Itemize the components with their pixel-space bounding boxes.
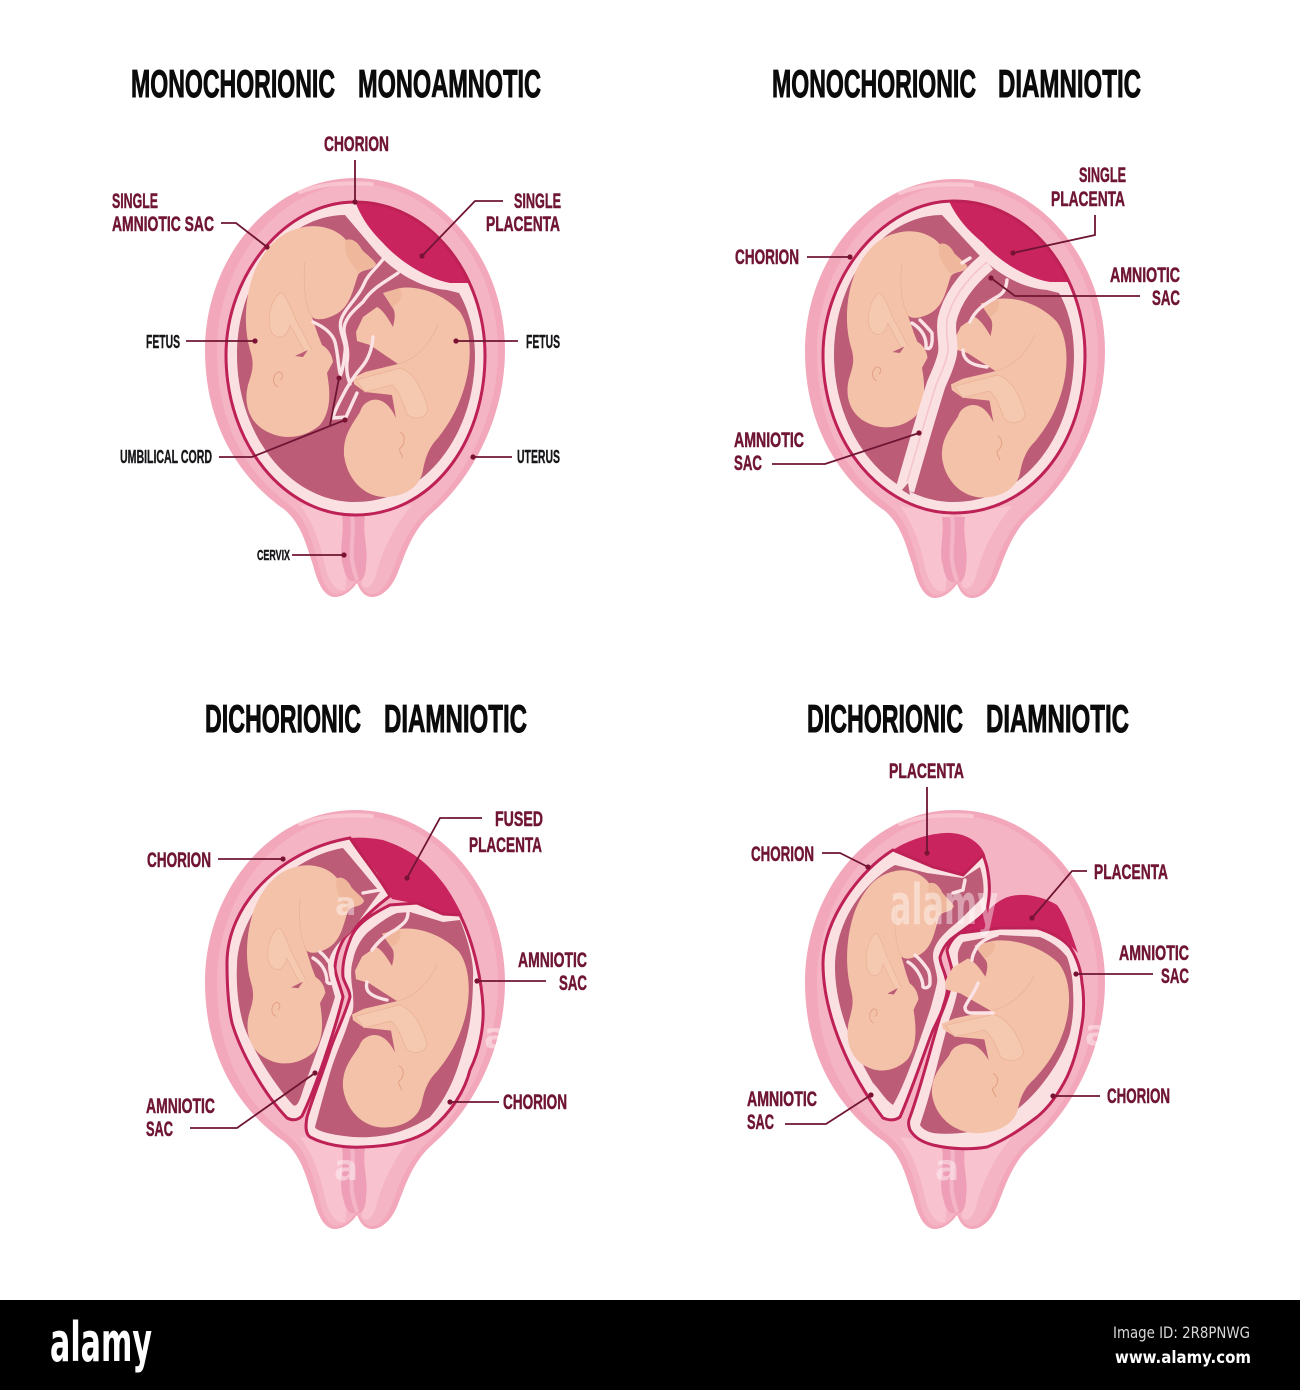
- chorion: [226, 202, 485, 515]
- callouts: PLACENTA: [1051, 188, 1125, 211]
- umbilical cords: [912, 258, 1007, 367]
- callouts: UTERUS: [517, 447, 560, 467]
- panel: dichorionic diamniotic fused: [146, 698, 587, 1229]
- callouts: [112, 133, 561, 564]
- callouts: AMNIOTIC: [734, 429, 804, 452]
- callouts: PLACENTA: [486, 213, 560, 236]
- callouts: [734, 164, 1180, 475]
- callouts: CHORION: [735, 246, 799, 269]
- amniotic band: [226, 202, 485, 515]
- callouts: SINGLE: [514, 190, 561, 213]
- right cavity: [315, 912, 473, 1137]
- callouts: SAC: [146, 1118, 173, 1141]
- umbilical cords: [908, 880, 997, 1013]
- callouts: CHORION: [324, 133, 389, 156]
- callouts: PLACENTA: [1094, 861, 1168, 884]
- uterus: [205, 810, 505, 1229]
- fetus right: [344, 287, 470, 497]
- callouts: CHORION: [751, 843, 814, 866]
- title: MONOCHORIONIC: [772, 63, 976, 106]
- placenta: [350, 838, 462, 916]
- left sac: [823, 850, 989, 1120]
- watermark marks: a: [335, 885, 357, 923]
- callouts: AMNIOTIC: [146, 1095, 215, 1118]
- callouts: AMNIOTIC SAC: [112, 213, 214, 236]
- callouts: CHORION: [1107, 1085, 1170, 1108]
- callouts: UMBILICAL CORD: [120, 447, 212, 467]
- callouts: AMNIOTIC: [518, 949, 587, 972]
- amniotic cavity: [834, 215, 1074, 502]
- dividing membrane: [902, 262, 987, 495]
- umbilical cords: [313, 258, 398, 418]
- footer logo: alamy: [50, 1311, 152, 1374]
- left cavity: [835, 865, 984, 1105]
- chorion: [823, 201, 1085, 513]
- right sac: [908, 928, 1084, 1149]
- footer bar: [0, 1300, 1300, 1390]
- placenta: [356, 204, 468, 283]
- callouts: [146, 808, 587, 1141]
- placenta top: [893, 833, 988, 877]
- callouts: CHORION: [147, 849, 211, 872]
- uterus: [805, 810, 1105, 1229]
- uterus: [805, 179, 1105, 598]
- callouts: SAC: [1161, 965, 1189, 988]
- callouts: PLACENTA: [889, 760, 964, 783]
- placenta: [950, 202, 1068, 282]
- title: DIAMNIOTIC: [384, 698, 527, 741]
- image id: Image ID: 2R8PNWG: [1113, 1323, 1250, 1342]
- watermark: a: [1085, 1013, 1109, 1054]
- right cavity: [920, 935, 1073, 1134]
- amniotic band: [823, 201, 1085, 513]
- left cavity: [237, 848, 380, 1106]
- title: DIAMNIOTIC: [998, 63, 1141, 106]
- fetus left: [246, 226, 376, 437]
- title: MONOAMNOTIC: [358, 63, 541, 106]
- callouts: FETUS: [526, 332, 560, 352]
- watermark: alamy: [890, 873, 998, 938]
- panel: dichorionic diamniotic separate: [747, 698, 1189, 1229]
- title: DIAMNIOTIC: [986, 698, 1129, 741]
- callouts: PLACENTA: [469, 834, 542, 857]
- watermark marks: a: [334, 1148, 358, 1189]
- amniotic cavity: [237, 215, 475, 502]
- watermark: a: [935, 1148, 959, 1189]
- watermark marks: a: [484, 1016, 508, 1057]
- left sac: [227, 838, 390, 1120]
- callouts: SAC: [559, 972, 587, 995]
- callouts: CERVIX: [257, 547, 290, 564]
- placenta right: [960, 895, 1078, 953]
- callouts: AMNIOTIC: [1119, 942, 1189, 965]
- umbilical cords: [313, 890, 408, 1000]
- callouts: SINGLE: [112, 190, 158, 213]
- callouts: [747, 760, 1189, 1134]
- callouts: SAC: [1152, 287, 1180, 310]
- title: DICHORIONIC: [807, 698, 963, 741]
- callouts: CHORION: [503, 1091, 567, 1114]
- callouts: AMNIOTIC: [1110, 264, 1180, 287]
- fetus left: [247, 865, 364, 1063]
- callouts: AMNIOTIC: [747, 1088, 817, 1111]
- fetus left: [847, 870, 954, 1071]
- callouts: SAC: [747, 1111, 774, 1134]
- watermark: [890, 873, 1109, 1189]
- fetus left: [847, 231, 967, 427]
- fetus right: [343, 928, 469, 1128]
- panel: monochorionic monoamniotic: [112, 63, 561, 597]
- callouts: FETUS: [146, 332, 180, 352]
- fetus right: [942, 298, 1066, 498]
- website: www.alamy.com: [1115, 1348, 1251, 1368]
- panel: monochorionic diamniotic: [734, 63, 1180, 598]
- callouts: SINGLE: [1079, 164, 1126, 187]
- title: DICHORIONIC: [205, 698, 361, 741]
- callouts: SAC: [734, 452, 762, 475]
- watermark marks: [334, 885, 508, 1189]
- title: MONOCHORIONIC: [131, 63, 335, 106]
- fetus right: [932, 940, 1069, 1133]
- callouts: FUSED: [495, 808, 543, 831]
- uterus: [205, 178, 505, 597]
- right sac: [306, 903, 483, 1147]
